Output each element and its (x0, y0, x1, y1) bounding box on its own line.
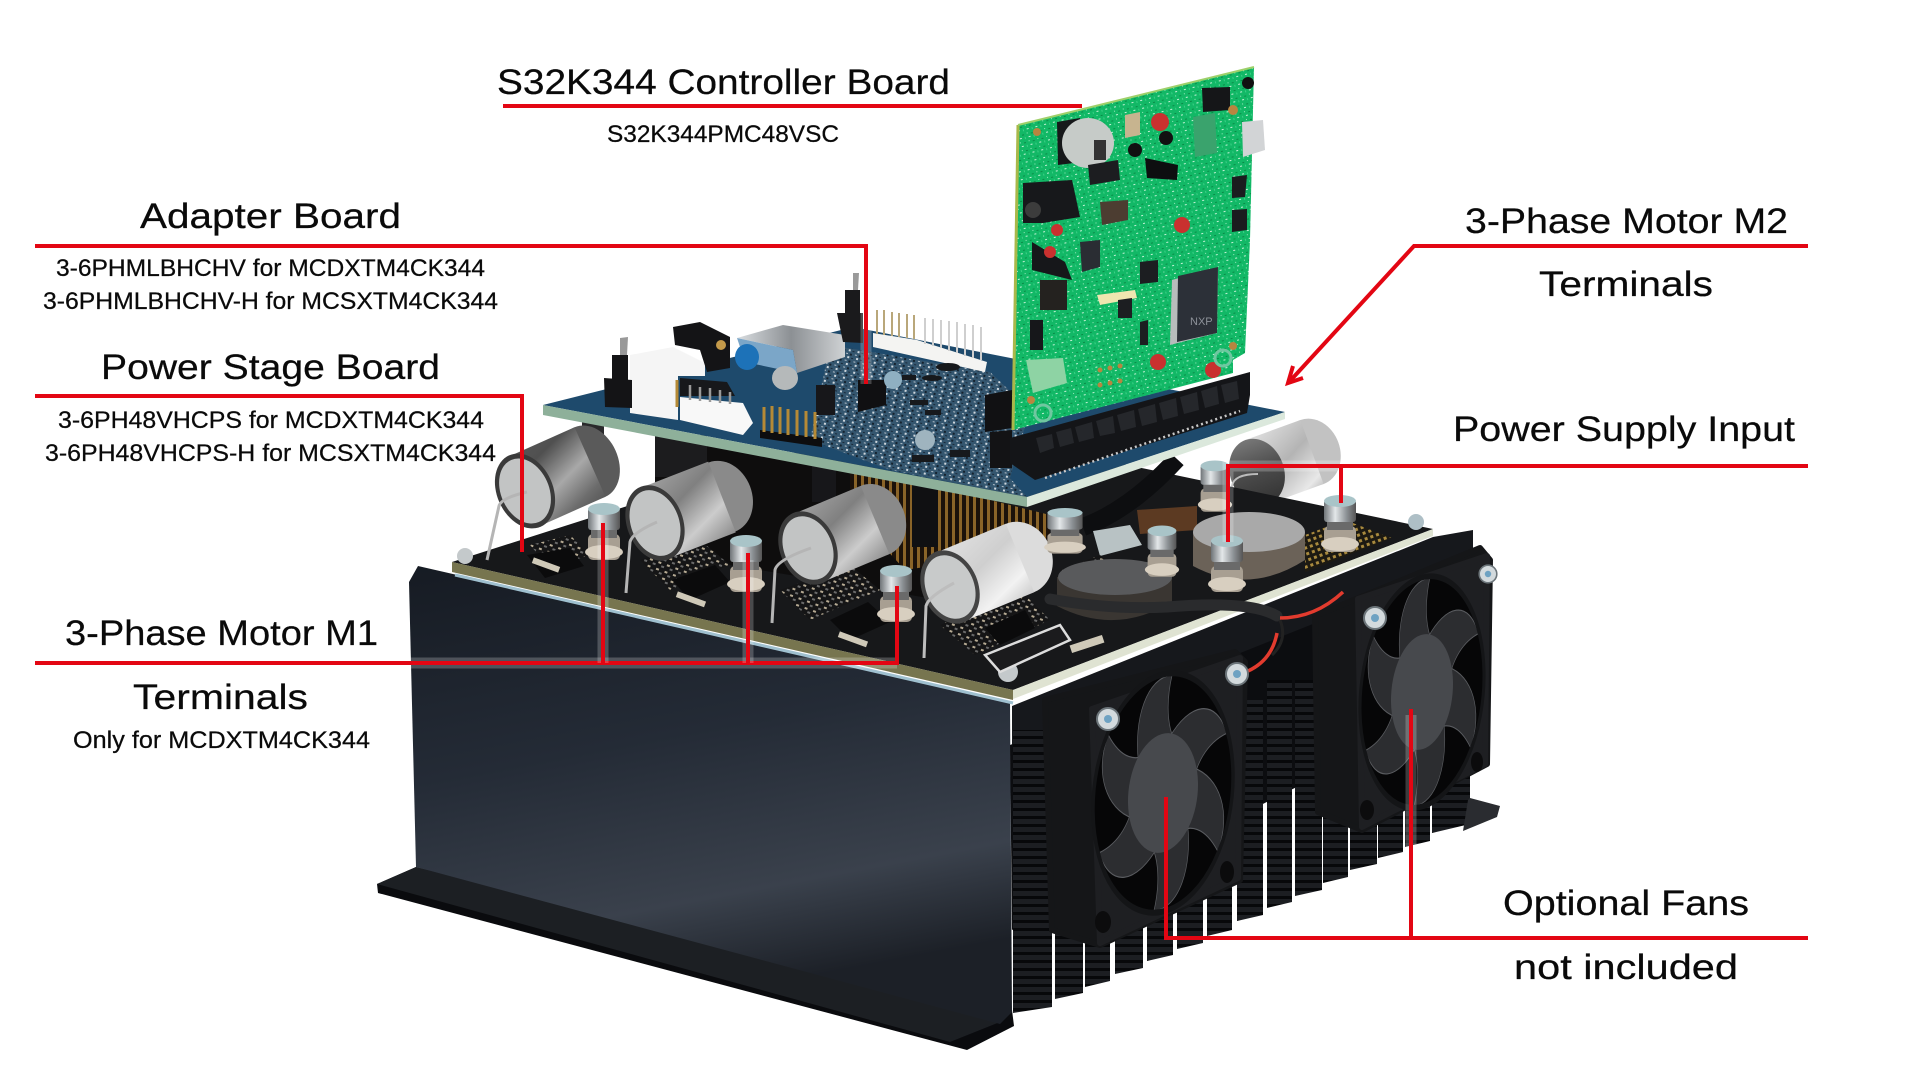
callout: S32K344 Controller Board: S32K344 Controller Board (497, 63, 950, 102)
fan 2 (1315, 546, 1497, 838)
product photo: motor control kit (377, 67, 1500, 1050)
power stage board (452, 418, 1433, 703)
callout: S32K344 Controller Board: S32K344PMC48VSC (607, 121, 839, 148)
gold pin header (760, 406, 822, 447)
DC jack (673, 322, 730, 372)
white connectors (630, 347, 753, 435)
left standoff (604, 337, 632, 408)
microcontroller: NXP (1190, 316, 1213, 328)
callout: Adapter Board: 3-6PHMLBHCHV for MCDXTM4CK344 (56, 255, 485, 282)
S32K344 controller board (1013, 67, 1265, 430)
capacitor 2 (615, 452, 763, 593)
heatsink (377, 530, 1500, 1050)
callout: 3-Phase Motor M1 Terminals: Terminals (133, 678, 308, 717)
blue capacitor (735, 344, 759, 370)
callout: Power Stage Board: 3-6PH48VHCPS for MCDXTM4CK344 (58, 407, 484, 434)
fin base (1010, 560, 1473, 930)
black ICs on adapter (902, 363, 970, 462)
silver relay (737, 325, 845, 373)
callout: 3-Phase Motor M2 Terminals: 3-Phase Motor M2 (1465, 202, 1788, 241)
callout: Optional Fans not included: Optional Fans (1503, 884, 1749, 923)
callout: 3-Phase Motor M2 Terminals (1288, 202, 1808, 383)
motor and supply terminals (585, 460, 1359, 622)
microcontroller (1170, 267, 1218, 345)
cooling fins (1013, 680, 1470, 1013)
components (1026, 77, 1265, 421)
small cap (772, 366, 798, 390)
small screws on board (457, 514, 1424, 682)
capacitor 3 (767, 474, 917, 623)
back connectors (873, 310, 987, 372)
surface-mount parts (530, 535, 1130, 655)
callout: Power Stage Board (35, 348, 522, 552)
right standoff (837, 273, 863, 343)
back capacitor (1220, 410, 1350, 513)
callout: 3-Phase Motor M2 Terminals: Terminals (1539, 265, 1713, 304)
callout: Power Supply Input: Power Supply Input (1453, 410, 1795, 449)
callout: 3-Phase Motor M1 Terminals: 3-Phase Motor M1 (65, 614, 378, 653)
ICs on power board (527, 548, 1035, 645)
round inductors (1057, 512, 1305, 620)
callout: S32K344 Controller Board (497, 63, 1082, 148)
power jack (1023, 180, 1080, 223)
capacitor 4 (909, 511, 1064, 658)
callout: Power Stage Board: 3-6PH48VHCPS-H for MCSXTM4CK344 (45, 440, 496, 467)
fan 1 (1045, 642, 1248, 945)
callout: Optional Fans not included: not included (1514, 948, 1738, 987)
callout: Adapter Board: 3-6PHMLBHCHV-H for MCSXTM4CK344 (43, 288, 498, 315)
callout: Power Supply Input (1228, 410, 1808, 542)
callout: Adapter Board (35, 197, 866, 384)
dark interior under adapter board (655, 436, 1040, 610)
callout: Adapter Board: Adapter Board (140, 197, 401, 236)
callout: Optional Fans not included (1166, 709, 1808, 987)
adapter board (543, 273, 1285, 507)
capacitor can (1057, 118, 1120, 185)
capacitor 1 (484, 416, 631, 560)
callout: 3-Phase Motor M1 Terminals (35, 523, 899, 754)
right-side headers (985, 390, 1012, 432)
jumper (858, 380, 886, 412)
controller board edge connector (1010, 372, 1250, 480)
callout: 3-Phase Motor M1 Terminals: Only for MCDXTM4CK344 (73, 727, 370, 754)
callout: Power Stage Board: Power Stage Board (101, 348, 440, 387)
fan wiring (1050, 592, 1343, 671)
